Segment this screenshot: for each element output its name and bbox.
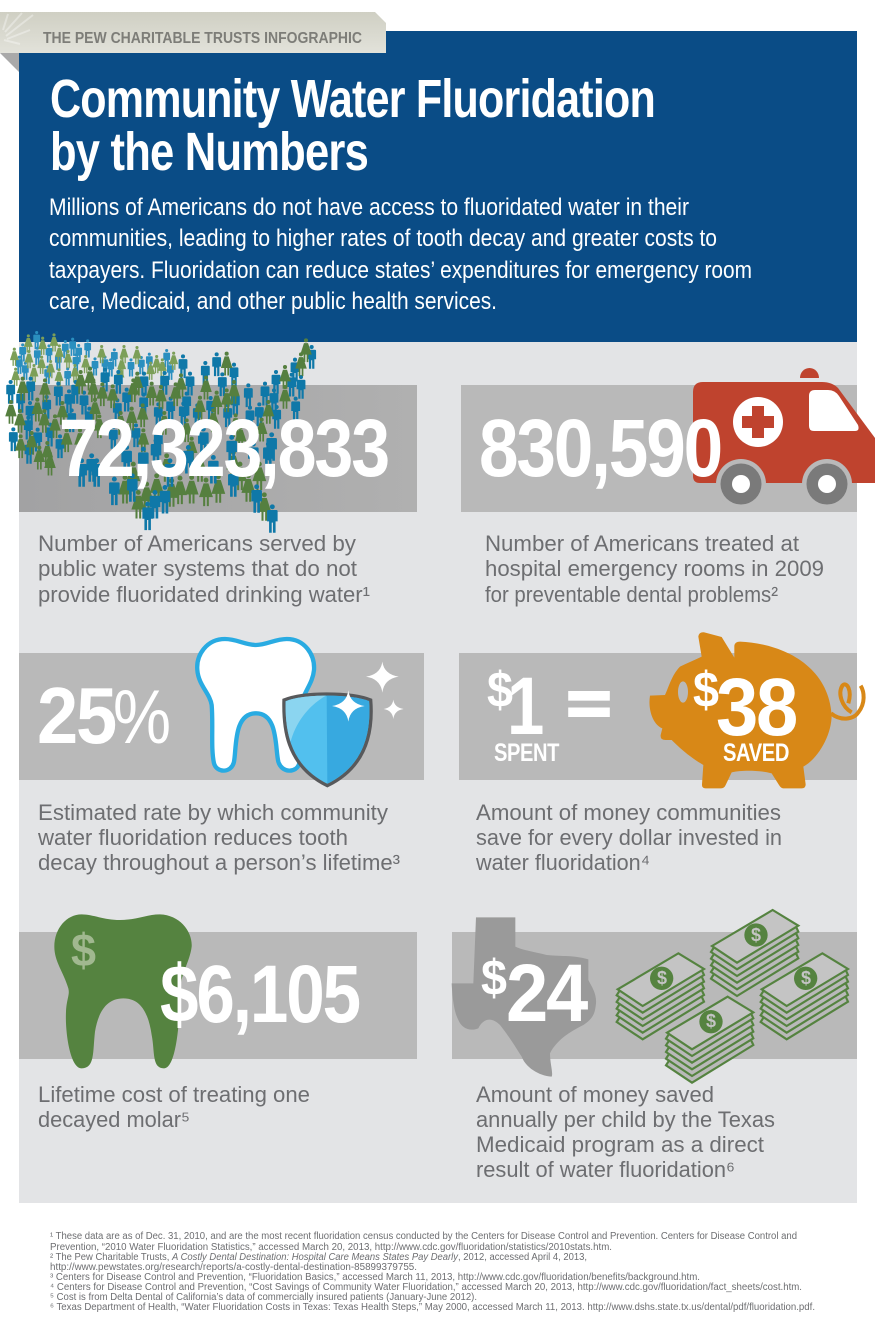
footnotes xyxy=(50,1231,815,1313)
description: provide fluoridated drinking water¹ xyxy=(38,582,370,607)
description: water fluoridation⁴ xyxy=(475,850,650,875)
description xyxy=(38,1082,310,1132)
description xyxy=(37,800,400,875)
footnotes: ⁴ Centers for Disease Control and Prevention, “Cost Savings of Community Water Fluoridation,” accessed March 20, 2013, http://www.cdc.gov/fluoridation/fact_sheets/cost.htm. xyxy=(50,1282,802,1293)
description xyxy=(475,800,782,875)
text: $38 saved: 38 xyxy=(716,662,797,753)
icon: stacks of money: $ xyxy=(751,925,761,945)
number: 25%: % xyxy=(113,675,171,760)
panel: $1 = $38 xyxy=(459,632,864,875)
number: $6,105: $6,105 xyxy=(160,949,360,1040)
number: 72,323,833: 72,323,833 xyxy=(59,403,388,494)
number: $24: $ xyxy=(481,950,507,1006)
panel: 72,323,833 xyxy=(5,331,417,607)
panel: blue header xyxy=(19,31,857,342)
icon: stacks of money: $ xyxy=(801,968,811,988)
number: 25% xyxy=(37,671,171,760)
description: save for every dollar invested in xyxy=(476,825,782,850)
icon: Texas xyxy=(452,917,596,1077)
text: $38 saved xyxy=(693,662,797,767)
description xyxy=(485,531,824,607)
equals sign: = xyxy=(567,670,611,737)
title: Community Water Fluoridation xyxy=(50,69,655,129)
footnotes: ⁶ Texas Department of Health, “Water Fluoridation Costs in Texas: Texas Health Steps,” May 2000, accessed March 11, 2013. http://www.dshs.state.tx.us/dental/pdf/fluoridation.pdf. xyxy=(50,1302,815,1313)
text: $1 spent xyxy=(487,661,559,767)
number: 830,590: 830,590 xyxy=(479,403,721,494)
text: $1 spent: SPENT xyxy=(494,739,559,767)
description: Medicaid program as a direct xyxy=(476,1132,764,1157)
description xyxy=(38,531,370,607)
intro paragraph: taxpayers. Fluoridation can reduce states’ expenditures for emergency room xyxy=(49,257,752,284)
number: 25%: 25 xyxy=(37,671,116,760)
icon: ambulance xyxy=(693,368,875,509)
description: decayed molar⁵ xyxy=(38,1107,190,1132)
icon: stacks of money: $ xyxy=(706,1011,716,1031)
title xyxy=(50,69,655,182)
description: for preventable dental problems² xyxy=(485,582,778,607)
intro paragraph: care, Medicaid, and other public health services. xyxy=(49,288,497,315)
description: Lifetime cost of treating one xyxy=(38,1082,310,1107)
text: $38 saved: SAVED xyxy=(723,739,789,767)
title: by the Numbers xyxy=(50,122,368,182)
description: Amount of money communities xyxy=(476,800,781,825)
description: Estimated rate by which community xyxy=(38,800,388,825)
intro paragraph: communities, leading to higher rates of tooth decay and greater costs to xyxy=(49,225,717,252)
intro paragraph: Millions of Americans do not have access to fluoridated water in their xyxy=(49,194,689,221)
panel: $6,105 xyxy=(19,914,417,1132)
banner: Pew Charitable Trusts tab xyxy=(0,12,386,72)
panel: 25% xyxy=(19,639,424,875)
footnotes: ¹ These data are as of Dec. 31, 2010, and are the most recent fluoridation census conducted by the Centers for Disease Control and Prevention. Centers for Disease Control and xyxy=(50,1231,797,1242)
footnotes: ² The Pew Charitable Trusts, A Costly Dental Destination: Hospital Care Means States Pay Dearly, 2012, accessed April 4, 2013, xyxy=(50,1252,587,1263)
dollar sign on molar: $ xyxy=(71,924,96,976)
panel: $24 xyxy=(452,910,857,1182)
banner: Pew Charitable Trusts tab: THE PEW CHARITABLE TRUSTS INFOGRAPHIC xyxy=(43,30,362,47)
description: public water systems that do not xyxy=(38,556,357,581)
text: $1 spent: 1 xyxy=(507,661,543,752)
number: $24: 24 xyxy=(506,948,589,1039)
text: $38 saved: $ xyxy=(693,662,719,718)
icon: stacks of money: $ xyxy=(657,968,667,988)
icon: stacks of money xyxy=(617,910,848,1083)
description: hospital emergency rooms in 2009 xyxy=(485,556,824,581)
icon: tooth with shield xyxy=(197,639,404,786)
description: Number of Americans served by xyxy=(38,531,356,556)
footnotes: ⁵ Cost is from Delta Dental of California’s data of commercially insured patients (January-June 2012). xyxy=(50,1292,477,1303)
description: decay throughout a person’s lifetime³ xyxy=(38,850,400,875)
description xyxy=(476,1082,775,1182)
icon: green molar xyxy=(54,914,192,1068)
description: result of water fluoridation⁶ xyxy=(476,1157,735,1182)
description: water fluoridation reduces tooth xyxy=(37,825,348,850)
intro paragraph xyxy=(49,194,752,315)
footnotes: ³ Centers for Disease Control and Prevention, “Fluoridation Basics,” accessed March 11, 2013, http://www.cdc.gov/fluoridation/benefits/background.htm. xyxy=(50,1272,700,1283)
text: $1 spent: $ xyxy=(487,662,513,718)
panel: 830,590 xyxy=(461,368,875,607)
description: Amount of money saved xyxy=(476,1082,714,1107)
footnotes: http://www.pewstates.org/research/reports/a-costly-dental-destination-85899379755. xyxy=(50,1262,417,1273)
description: annually per child by the Texas xyxy=(476,1107,775,1132)
footnotes: Prevention, “2010 Water Fluoridation Statistics,” accessed March 20, 2013, http://www.cdc.gov/fluoridation/statistics/2010stats.htm. xyxy=(50,1242,612,1253)
description: Number of Americans treated at xyxy=(485,531,799,556)
panel: statistics background xyxy=(19,342,857,1203)
icon: map of people xyxy=(5,331,316,533)
icon: piggy bank xyxy=(649,632,864,788)
